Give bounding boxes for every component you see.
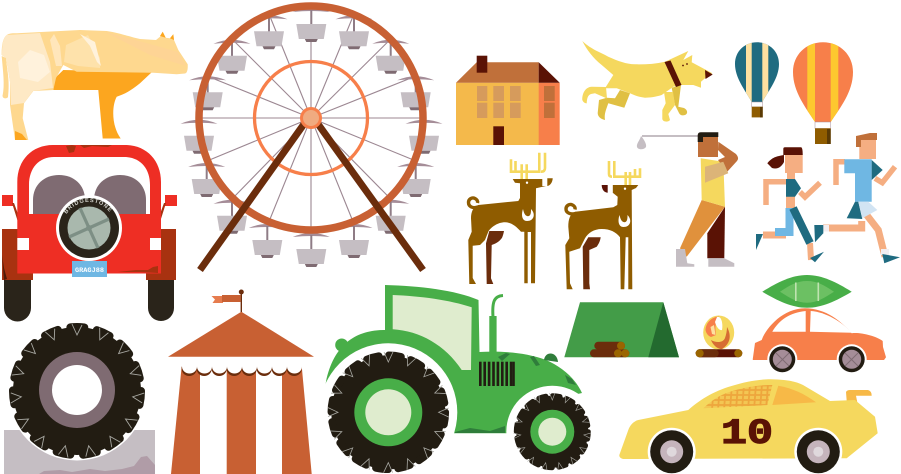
wheel spokes (199, 6, 424, 232)
stripes (171, 366, 312, 474)
nose (705, 70, 713, 79)
orange beetle car (753, 308, 886, 374)
tractor body (325, 285, 582, 433)
far hind leg (583, 237, 601, 289)
legs (763, 232, 786, 238)
car body (619, 379, 878, 459)
hatched window (704, 385, 772, 408)
fenders (2, 229, 176, 280)
eyes (682, 63, 688, 66)
dog torso (582, 41, 712, 98)
tire brand text: BRIDGESTONE (64, 198, 112, 214)
back leg (707, 207, 725, 258)
rear tires (4, 278, 174, 322)
wheels (648, 428, 842, 474)
legs (823, 221, 862, 228)
tail lights (17, 238, 161, 250)
near hind leg (582, 87, 607, 103)
deer torso (468, 179, 546, 284)
orange flame tongue (706, 316, 719, 337)
car number: 10 (721, 414, 773, 454)
ferris wheel (180, 6, 442, 270)
front fender cutout (506, 386, 598, 474)
front leg (680, 200, 725, 257)
shoes (676, 249, 734, 267)
antlers (511, 153, 545, 179)
seats (33, 175, 146, 215)
wheel tread ticks (328, 352, 449, 473)
license plate: GRAGJ88 (75, 267, 104, 274)
gondolas (180, 8, 442, 267)
wear marks (455, 353, 576, 433)
golfer (637, 132, 738, 267)
near front leg (662, 92, 675, 122)
exhaust pipe (489, 296, 503, 354)
campfire (696, 316, 742, 357)
tail curl (566, 204, 576, 214)
fire logs (696, 349, 742, 357)
neck crescent (522, 209, 534, 221)
tail curl (468, 198, 478, 208)
roll cage (17, 145, 161, 216)
rear wheel (328, 352, 449, 473)
windows (772, 311, 852, 333)
tractor (319, 285, 598, 474)
inner ring (254, 62, 368, 174)
ponytail (767, 155, 784, 169)
front windows (477, 86, 521, 118)
big tire on ground (4, 322, 155, 474)
spoiler (846, 390, 872, 406)
orange balloon (793, 42, 853, 144)
rear fender cutout (319, 343, 457, 474)
canoe (762, 275, 852, 308)
flag (212, 290, 244, 312)
antlers (609, 161, 640, 185)
camping tent (564, 302, 679, 357)
wheel tread ticks (514, 393, 591, 470)
midriff (786, 196, 795, 208)
shirt (844, 159, 872, 202)
side windows (544, 86, 555, 118)
wheels (767, 344, 867, 374)
outer ring (199, 6, 423, 230)
rear window (772, 386, 816, 405)
head (698, 136, 718, 157)
yellow race car (619, 379, 878, 474)
sock (823, 225, 829, 232)
arm (718, 142, 738, 172)
rust specks (2, 145, 158, 280)
arms (766, 182, 820, 205)
head (785, 154, 803, 173)
house (456, 56, 560, 145)
deer torso (565, 185, 638, 289)
door (493, 126, 504, 145)
cow tail (2, 56, 9, 98)
far hind leg (598, 90, 630, 120)
support legs (200, 124, 423, 270)
dark flame crescent (711, 327, 730, 349)
mirrors (2, 195, 177, 222)
deer one (468, 153, 553, 284)
engine grille (479, 362, 515, 386)
white flame tongue (715, 317, 722, 330)
shirt (701, 158, 725, 207)
tire (13, 327, 141, 455)
shoes (814, 225, 900, 263)
spare tire (56, 195, 122, 261)
teal balloon (735, 42, 779, 118)
female runner (756, 147, 824, 262)
fender knob (335, 338, 348, 352)
collar (664, 60, 682, 87)
neck crescent (619, 215, 630, 227)
far hind leg (486, 231, 504, 284)
log pile (590, 342, 629, 357)
golf club (637, 135, 699, 149)
jeep (2, 145, 177, 322)
deer two (565, 161, 640, 289)
muzzle (608, 185, 613, 193)
cow hide patches (2, 33, 53, 105)
shoes (756, 234, 824, 262)
ground mound (4, 430, 155, 474)
arms (836, 162, 895, 185)
far front leg (672, 85, 687, 115)
dog (582, 41, 713, 122)
cow (2, 30, 188, 140)
shorts (847, 202, 862, 219)
license plate (72, 261, 107, 277)
head (859, 137, 876, 159)
muzzle (542, 178, 547, 186)
jeep body (17, 214, 161, 274)
hood cap (544, 353, 558, 362)
cab window (393, 295, 472, 370)
scallop trim (182, 365, 302, 376)
circus tent (168, 290, 314, 474)
top (786, 179, 801, 197)
flame (703, 316, 734, 350)
roof (168, 312, 314, 357)
front wheel (514, 393, 591, 470)
hub (302, 108, 320, 128)
tire tread ticks (10, 324, 144, 458)
sleeve (705, 162, 728, 183)
sleeve (872, 160, 883, 180)
male runner (814, 133, 900, 263)
